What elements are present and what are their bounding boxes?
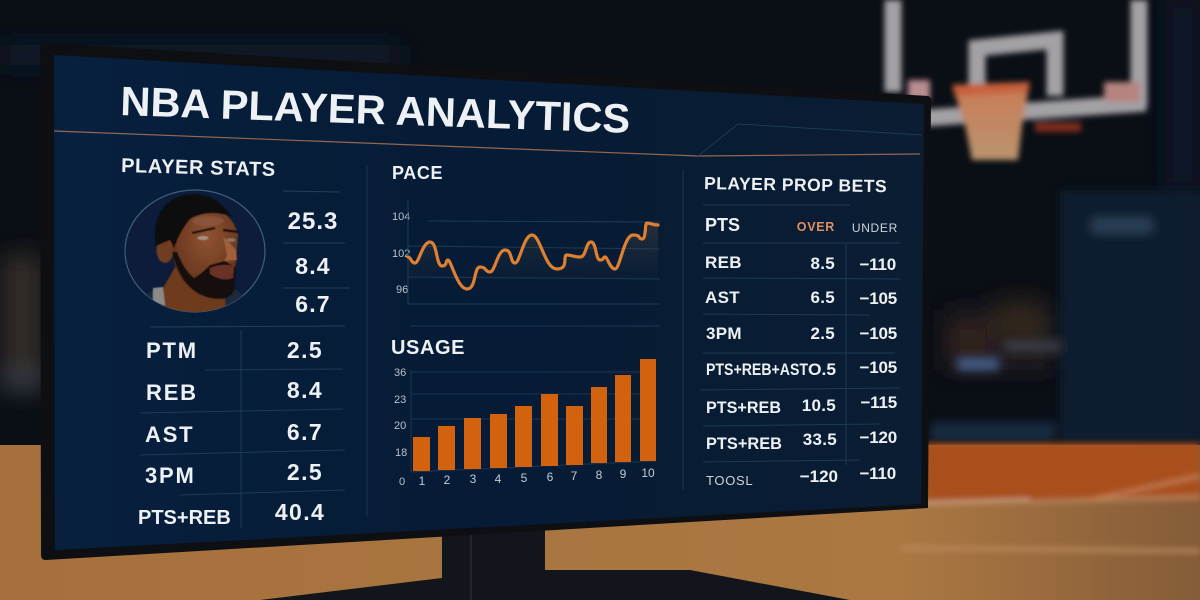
stat table: 3PM <box>145 463 196 488</box>
prop bets table: −105 <box>860 358 897 377</box>
bar labels: 5 <box>521 471 528 485</box>
bar labels: 1 <box>419 474 426 488</box>
prop bets table: −110 <box>859 255 896 274</box>
prop bets table: PTS <box>705 215 740 235</box>
monitor stand <box>260 530 850 600</box>
usage axis labels: 18 <box>395 447 407 459</box>
pace axis labels: 102 <box>392 248 410 260</box>
prop bets table: 6.5 <box>810 288 835 307</box>
prop bets table: −105 <box>860 289 897 308</box>
heading: player prop bets: PLAYER PROP BETS <box>704 173 887 196</box>
panel: usage chart <box>391 326 660 488</box>
prop bets table: OVER <box>797 220 835 234</box>
bar labels: 6 <box>547 470 554 484</box>
prop bets table: REB <box>705 253 742 272</box>
pace line chart <box>408 223 658 289</box>
screen <box>54 55 924 550</box>
stat table: 40.4 <box>275 499 325 525</box>
bar labels: 2 <box>444 473 451 487</box>
panel: pace chart <box>392 163 660 304</box>
heading: player stats: PLAYER STATS <box>121 155 276 181</box>
wooden court floor <box>0 443 1200 600</box>
pace axis labels: 104 <box>392 211 410 223</box>
bar labels: 3 <box>470 472 477 486</box>
usage bar chart <box>413 359 656 471</box>
top stat values: 25.3 <box>288 208 338 235</box>
stat table: PTS+REB <box>138 507 231 529</box>
title divider <box>54 131 920 156</box>
usage axis labels: 23 <box>394 394 406 406</box>
top stat values: 8.4 <box>295 253 331 279</box>
heading: usage: USAGE <box>391 337 465 359</box>
bar labels: 4 <box>495 472 502 486</box>
prop bets table: −120 <box>860 428 897 447</box>
bar labels: 7 <box>571 469 578 483</box>
prop bets table: PTS+REB <box>706 434 782 453</box>
stat table: 2.5 <box>287 337 323 363</box>
usage axis labels: 20 <box>394 420 406 432</box>
stat table: PTM <box>146 338 198 363</box>
heading: pace: PACE <box>392 163 443 183</box>
prop bets table: UNDER <box>852 221 898 235</box>
prop bets table: O.5 <box>808 360 836 379</box>
bar labels: 10 <box>641 466 655 480</box>
prop bets table: −120 <box>800 467 838 486</box>
prop bets table: −115 <box>860 393 897 412</box>
bar labels <box>419 466 655 488</box>
stat table: 8.4 <box>287 377 323 403</box>
title: NBA PLAYER ANALYTICS <box>120 78 631 142</box>
monitor <box>40 43 931 560</box>
usage axis labels <box>394 367 407 488</box>
prop bets table: PTS+REB <box>706 398 781 417</box>
usage axis labels: 0 <box>399 476 405 488</box>
basketball hoop <box>893 0 1146 160</box>
prop bets table: AST <box>705 288 740 307</box>
stat table: REB <box>146 380 198 405</box>
pace axis labels: 96 <box>396 284 408 296</box>
top stat values <box>150 191 350 327</box>
stat table: 2.5 <box>287 459 323 485</box>
top stat values: 6.7 <box>295 291 331 317</box>
prop bets table: TOOSL <box>706 473 753 488</box>
prop bets table: PTS+REB+AST <box>706 360 809 379</box>
prop bets table: −105 <box>860 324 897 343</box>
bar labels: 9 <box>620 467 627 481</box>
prop bets table: 8.5 <box>810 254 835 273</box>
prop bets table: 2.5 <box>810 324 835 343</box>
pace axis labels <box>392 211 410 296</box>
prop bets table: 33.5 <box>803 430 837 449</box>
prop bets table: −110 <box>859 464 896 483</box>
stat table: 6.7 <box>287 419 323 445</box>
bar labels: 8 <box>596 468 603 482</box>
stat table <box>138 330 345 529</box>
panel: player prop bets <box>700 173 900 488</box>
panel: player stats <box>121 155 350 529</box>
prop bets table: 3PM <box>706 324 742 343</box>
stat table: AST <box>145 422 194 447</box>
player portrait <box>125 190 265 315</box>
prop bets table: 10.5 <box>802 396 836 415</box>
prop bets table <box>700 205 900 488</box>
usage axis labels: 36 <box>394 367 406 379</box>
